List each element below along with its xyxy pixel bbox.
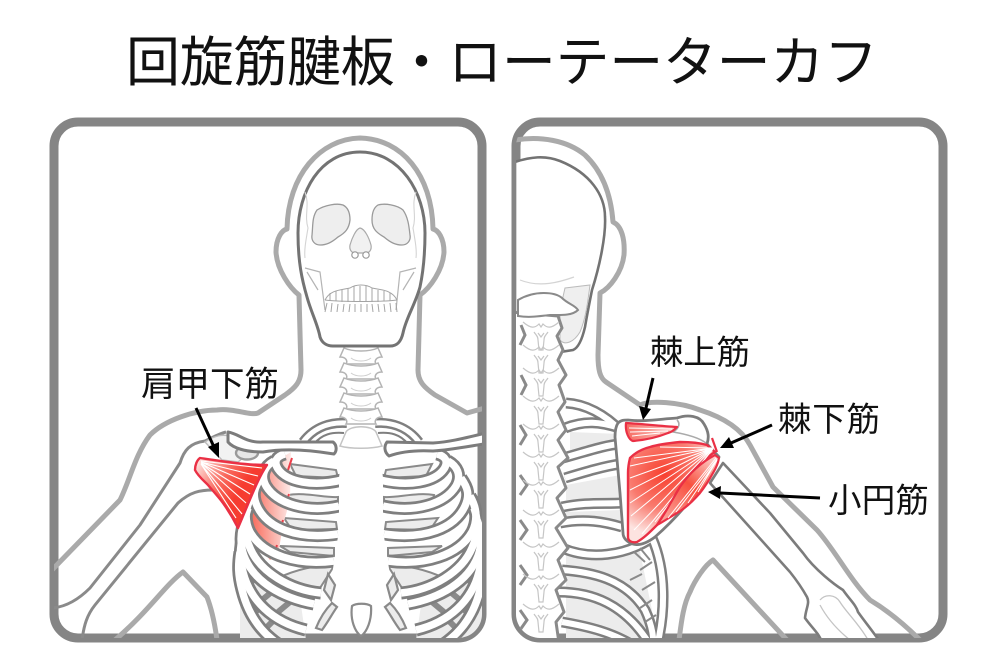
rib cage xyxy=(239,454,483,652)
lower rib cage shading xyxy=(240,583,482,638)
label: supraspinatus: 棘上筋 xyxy=(650,335,750,372)
panel: front view xyxy=(50,122,490,652)
cervical spine xyxy=(340,348,382,448)
rib cross hatching xyxy=(253,582,469,628)
acromion and coracoid xyxy=(205,435,258,462)
figure: back skeleton xyxy=(510,139,920,650)
body outline xyxy=(515,139,920,640)
skull xyxy=(298,152,425,346)
muscle: teres minor xyxy=(657,438,719,525)
sternum xyxy=(332,474,390,570)
scapula xyxy=(615,416,719,545)
first rib ring xyxy=(303,423,419,444)
arrow: to subscapularis xyxy=(196,408,219,458)
cheek lines xyxy=(305,192,416,258)
label: teres minor: 小円筋 xyxy=(828,483,929,520)
arm xyxy=(710,463,880,642)
arrow: to teres minor xyxy=(708,486,820,499)
label: subscapularis: 肩甲下筋 xyxy=(141,366,279,404)
label: infraspinatus: 棘下筋 xyxy=(778,402,880,439)
title: 回旋筋腱板・ローテーターカフ xyxy=(126,33,878,93)
xiphoid and lower cartilage xyxy=(316,574,406,636)
arrow: to infraspinatus xyxy=(720,425,772,448)
arrow: to supraspinatus xyxy=(639,378,653,420)
muscle: infraspinatus xyxy=(628,442,715,542)
muscle: subscapularis xyxy=(195,458,267,528)
acromion detail xyxy=(673,420,706,443)
eye sockets xyxy=(312,204,350,245)
muscle shown through ribs xyxy=(252,452,291,560)
nose xyxy=(350,228,371,253)
panel: back view xyxy=(510,122,943,650)
muscle: supraspinatus xyxy=(626,423,677,441)
arm bone xyxy=(52,432,226,640)
clavicles xyxy=(228,432,490,456)
back rib cage xyxy=(558,403,663,650)
jaw shade xyxy=(560,285,590,343)
figure: front skeleton xyxy=(50,138,490,652)
body outline xyxy=(50,138,485,640)
teeth xyxy=(325,285,397,312)
chest cavity shading xyxy=(278,464,444,588)
spine xyxy=(510,293,578,650)
skull back xyxy=(515,157,605,352)
